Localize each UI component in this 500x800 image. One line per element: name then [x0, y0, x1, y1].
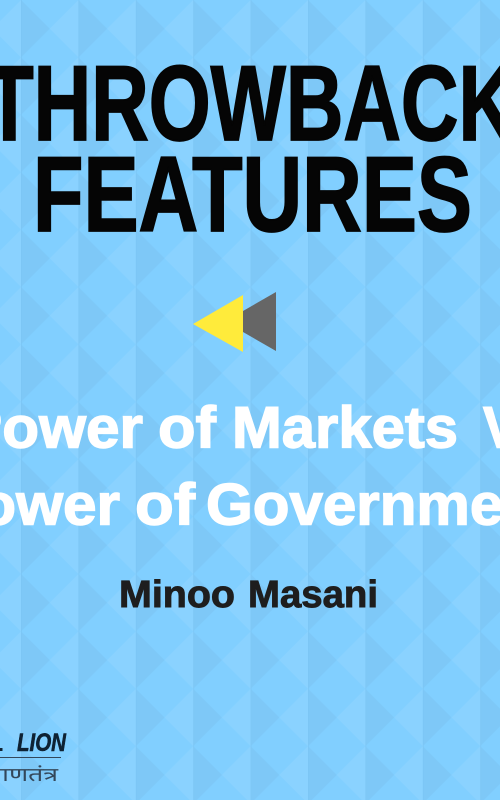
subtitle: of [158, 396, 217, 460]
title [0, 43, 500, 254]
icon: rewind arrows [193, 292, 276, 352]
author name: Minoo [119, 574, 235, 616]
subtitle [0, 396, 500, 538]
author name: Masani [248, 574, 378, 616]
logo: LION [17, 729, 67, 757]
subtitle: Markets [232, 396, 458, 460]
logo [0, 729, 67, 786]
subtitle: of [135, 472, 196, 538]
author name [119, 574, 378, 616]
